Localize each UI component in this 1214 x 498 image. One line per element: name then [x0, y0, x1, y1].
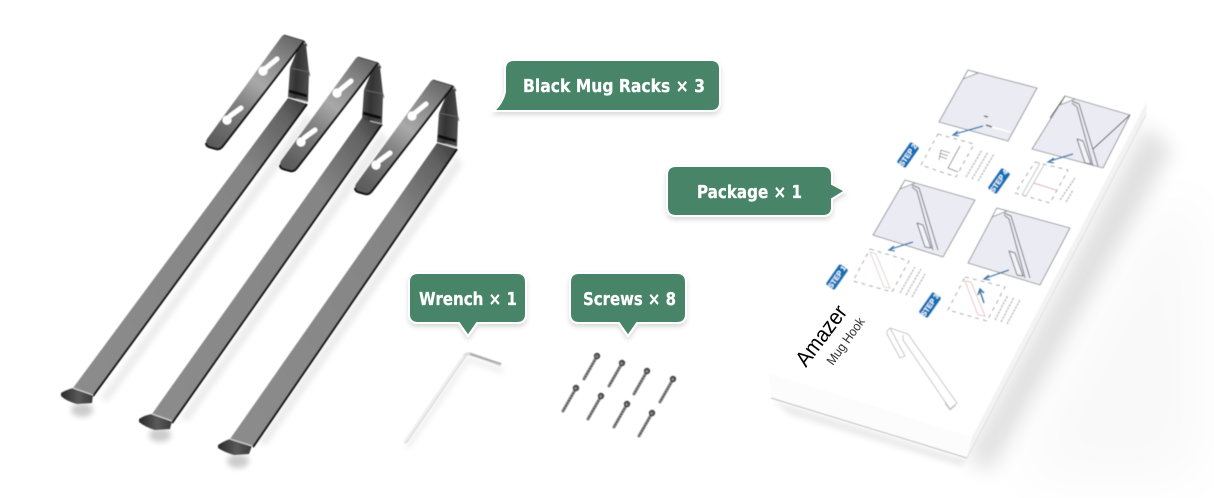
callout: package: Package × 1 [697, 183, 802, 203]
wrench [405, 354, 503, 447]
callout: screws [570, 273, 686, 336]
brand name: Amazer [790, 300, 852, 371]
callout: black mug racks [494, 60, 720, 111]
blue arrows [889, 126, 1073, 303]
background shadow wash [1010, 200, 1200, 480]
callout: wrench: Wrench × 1 [419, 290, 517, 310]
screws [563, 353, 676, 436]
line drawing of hook [887, 328, 957, 410]
step box sketches [870, 146, 1056, 316]
step 4 badge: STEP 4 [988, 167, 1011, 194]
black mug rack 1 [61, 35, 312, 417]
small instruction text lines [900, 150, 1075, 324]
package box [769, 50, 1147, 466]
callout: screws: Screws × 8 [583, 290, 676, 310]
callout: black mug racks: Black Mug Racks × 3 [523, 77, 705, 97]
callout: package [667, 166, 845, 216]
panel hook drawings [900, 70, 1130, 278]
step 3 badge: STEP 3 [919, 292, 941, 318]
step 1 badge: STEP 1 [826, 264, 848, 290]
instruction panels [873, 70, 1130, 285]
step 2 badge: STEP 2 [897, 142, 919, 168]
box shadow [967, 125, 1172, 472]
product name: Mug Hook [823, 314, 868, 368]
black mug rack 3 [218, 80, 463, 468]
callout: wrench [409, 273, 526, 336]
black mug rack 2 [139, 57, 388, 442]
dashed step boxes [853, 134, 1068, 321]
